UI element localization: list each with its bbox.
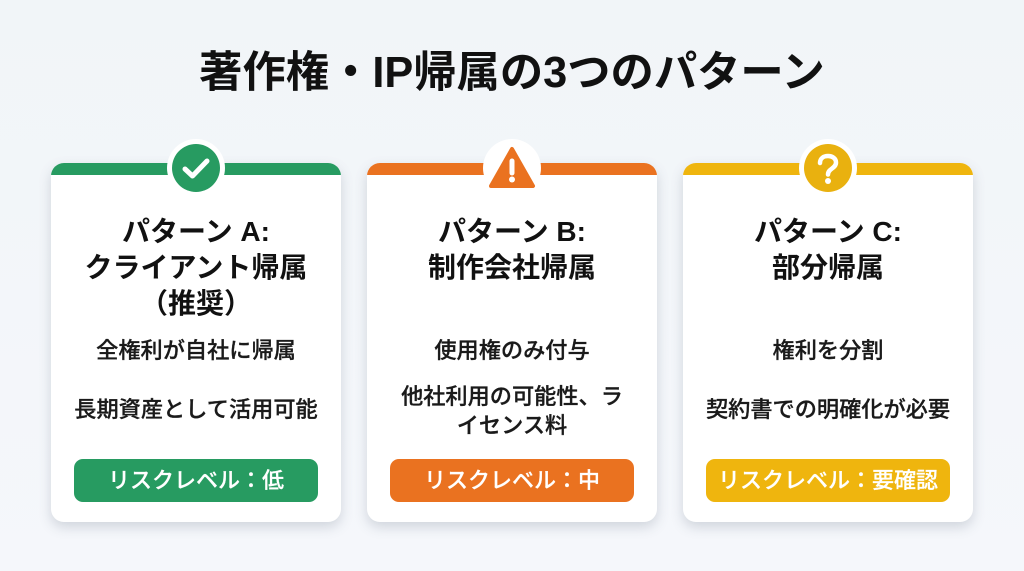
heading: pattern B — [428, 216, 596, 283]
badge: risk to confirm — [706, 459, 950, 502]
heading: pattern A — [85, 216, 307, 319]
heading: pattern C: パターン C: — [754, 216, 902, 247]
text: pattern B point 2: 他社利用の可能性、ラ — [401, 384, 623, 409]
badge: risk medium — [390, 459, 634, 502]
panel: pattern C — [678, 163, 978, 532]
heading: pattern C — [754, 216, 902, 283]
badge: risk to confirm: リスクレベル：要確認 — [718, 468, 938, 493]
card B background — [367, 163, 657, 522]
card C background — [683, 163, 973, 522]
card A background — [51, 163, 341, 522]
badge: risk low: リスクレベル：低 — [108, 468, 284, 493]
title: 著作権・IP帰属の3つのパターン — [199, 49, 825, 97]
panel: pattern A — [46, 163, 346, 532]
badge: risk medium: リスクレベル：中 — [424, 468, 600, 493]
heading: pattern B: パターン B: — [438, 216, 586, 247]
panel: pattern B — [362, 163, 662, 532]
text: pattern B point 2: イセンス料 — [457, 413, 567, 438]
icon: warning — [483, 139, 541, 188]
heading: pattern B: 制作会社帰属 — [428, 252, 596, 283]
text: pattern C point 2: 契約書での明確化が必要 — [706, 397, 950, 422]
text: pattern A point 1: 全権利が自社に帰属 — [96, 338, 296, 363]
heading: pattern A: パターン A: — [122, 216, 270, 247]
badge: risk low — [74, 459, 318, 502]
heading: pattern A: （推奨） — [140, 288, 252, 319]
icon: check — [167, 139, 225, 192]
heading: pattern A: クライアント帰属 — [85, 252, 307, 283]
text: pattern C point 1: 権利を分割 — [773, 338, 883, 363]
text: pattern B point 2 — [401, 384, 623, 438]
text: pattern B point 1: 使用権のみ付与 — [434, 338, 590, 363]
heading: pattern C: 部分帰属 — [772, 252, 884, 283]
text: pattern A point 2: 長期資産として活用可能 — [74, 397, 318, 422]
icon: question — [799, 139, 857, 192]
